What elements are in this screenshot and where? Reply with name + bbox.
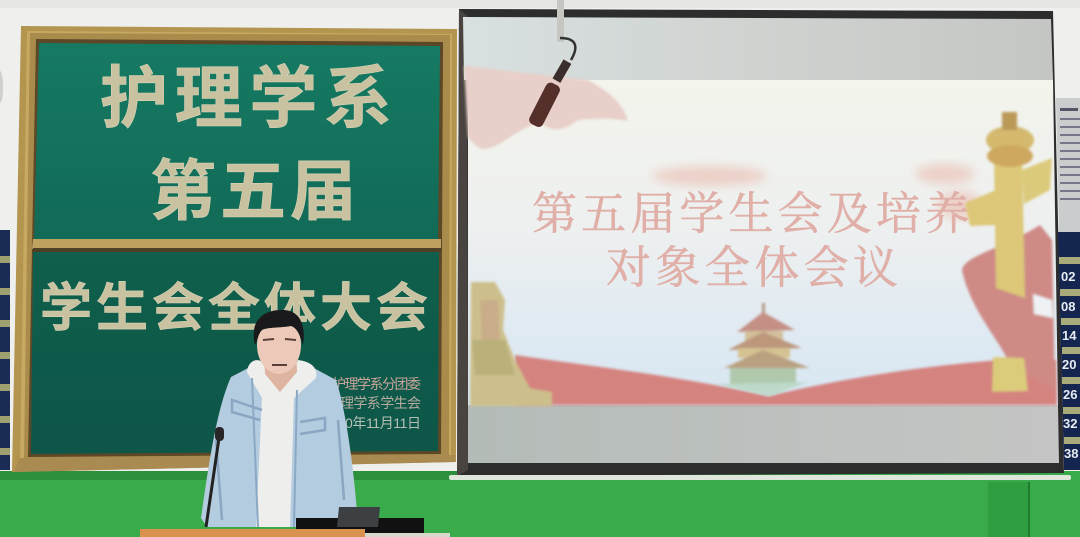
projector screen [449,0,1071,480]
laptop and lectern [140,507,450,537]
microphone hanging from ceiling [527,0,575,129]
desk microphone [206,427,224,527]
right wall calendar strip: 20 [1062,357,1076,372]
right wall calendar strip: 02 [1061,269,1075,284]
board organiser credits: 理学系学生会 [340,395,421,411]
lower board panel [31,252,439,454]
board organiser credits [332,376,421,431]
outer gold frame [12,26,457,472]
slide temple of heaven [716,303,810,396]
slide stone lion [470,282,552,406]
slide red wall [515,355,1057,405]
eyes and mouth [263,339,296,365]
right wall calendar strip: 14 [1062,328,1077,343]
board organiser credits: 护理学系分团委 [332,376,421,392]
right wall notice board [1056,98,1080,232]
frame bottom ledge [14,455,455,472]
right wall calendar strip [1058,232,1080,470]
slide title: 第五届学生会及培养 [532,189,970,239]
left wall calendar strip [0,230,10,470]
right wall calendar strip: 38 [1064,446,1078,461]
slide title: 对象全体会议 [606,243,898,293]
hoodie [247,360,316,527]
frame divider [32,239,441,249]
screen casing [457,9,1064,476]
slide huabiao column with red ribbon [962,112,1055,392]
upper board panel [34,43,440,239]
board heading line 3: 学生会全体大会 [40,280,428,338]
jacket details [216,400,344,520]
top band [463,17,1053,80]
neck [264,350,297,392]
screen base bar [449,475,1071,480]
hair [254,310,304,345]
face [257,316,301,374]
blackboard with frame [12,26,457,472]
right wall calendar strip: 32 [1063,416,1077,431]
right wall calendar strip: 26 [1063,387,1077,402]
slide flag corner [464,66,628,149]
jacket [201,366,357,527]
board heading line 2: 第五届 [150,154,356,228]
bottom band [468,405,1059,463]
slide title [532,189,970,293]
slide clouds [652,164,982,219]
board heading line 1: 护理学系 [100,61,392,137]
slide background [468,80,1058,405]
speaker [201,310,357,527]
green lower wall [0,471,1080,537]
board organiser credits: 0年11月11日 [345,415,421,431]
right wall calendar strip: 08 [1061,299,1075,314]
